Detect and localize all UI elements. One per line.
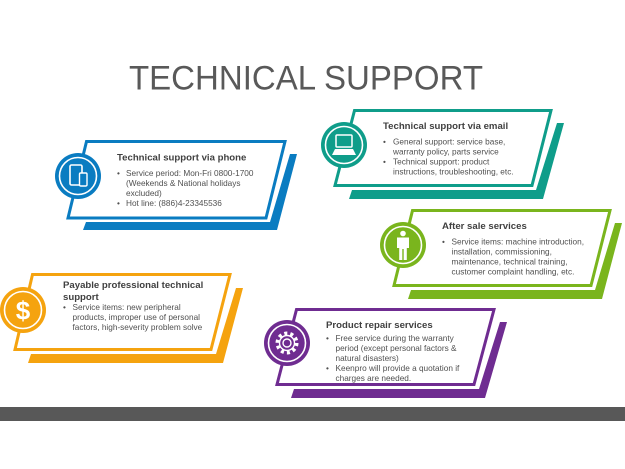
text: repair details: charges are needed. [336,374,411,383]
icon: dollar [0,287,46,333]
text: email details: General support: service base, [393,138,505,146]
panel frame: repair [277,310,494,384]
panel: email support [321,110,564,199]
text: payable details: • [63,303,66,312]
icon: laptop [321,122,367,168]
icon: dollar: $ [16,296,31,326]
panel frame: phone [68,142,285,218]
panel shadow: phone [83,154,297,230]
text: payable details: products, improper use of personal [72,313,200,322]
text: after sale details: Service items: machine introduction, [452,238,584,246]
text: phone details: • [117,199,120,208]
heading: after sale: After sale services [442,221,527,232]
text: email details: • [383,158,386,166]
text: payable details: factors, high-severity problem solve [72,323,203,332]
text: repair details: Free service during the warranty [336,334,455,343]
panel frame: after sale [394,210,610,286]
text: phone details: Service period: Mon-Fri 0800-1700 [126,169,254,178]
text: after sale details: customer complaint handling, etc. [452,268,574,276]
text: repair details: natural disasters) [336,354,399,363]
heading: phone: Technical support via phone [117,152,246,164]
panel frame: email [335,110,551,186]
heading: email: Technical support via email [383,121,508,132]
text: phone details: • [117,169,120,178]
text: repair details: period (except personal factors & [336,344,457,353]
heading: payable: support [63,292,100,303]
text: email details: • [383,138,386,146]
heading: repair: Product repair services [326,320,433,331]
text: repair details: • [326,334,329,343]
heading: payable: Payable professional technical [63,280,203,291]
icon: gear [264,320,310,366]
text: after sale details: • [442,238,445,246]
panel shadow: payable [28,288,243,363]
text: phone details: (Weekends & National holidays [126,179,240,188]
panel shadow: repair [291,322,507,398]
panel shadow: email [349,123,564,199]
text: after sale details: installation, commissioning, [452,248,552,256]
text: repair details: Keenpro will provide a quotation if [336,364,460,373]
title: TECHNICAL SUPPORT [129,60,483,98]
text: after sale details: maintenance, technical training, [452,258,568,266]
panel: phone support [55,142,297,230]
panel: payable support [0,274,243,363]
panel: product repair [264,310,507,398]
text: email details: warranty policy, parts service [392,148,499,156]
text: email details: Technical support: product [393,158,490,166]
panel shadow: after sale [408,223,622,299]
icon: person [380,222,426,268]
panel frame: payable [15,274,230,350]
text: payable details: Service items: new peripheral [72,303,181,312]
text: phone details: Hot line: (886)4-23345536 [126,199,222,208]
text: phone details: excluded) [126,189,162,198]
footer bar [0,407,625,421]
panel: after sale services [380,210,622,299]
text: email details: instructions, troubleshooting, etc. [393,168,514,176]
icon: tablet and phone [55,153,101,199]
text: repair details: • [326,364,329,373]
